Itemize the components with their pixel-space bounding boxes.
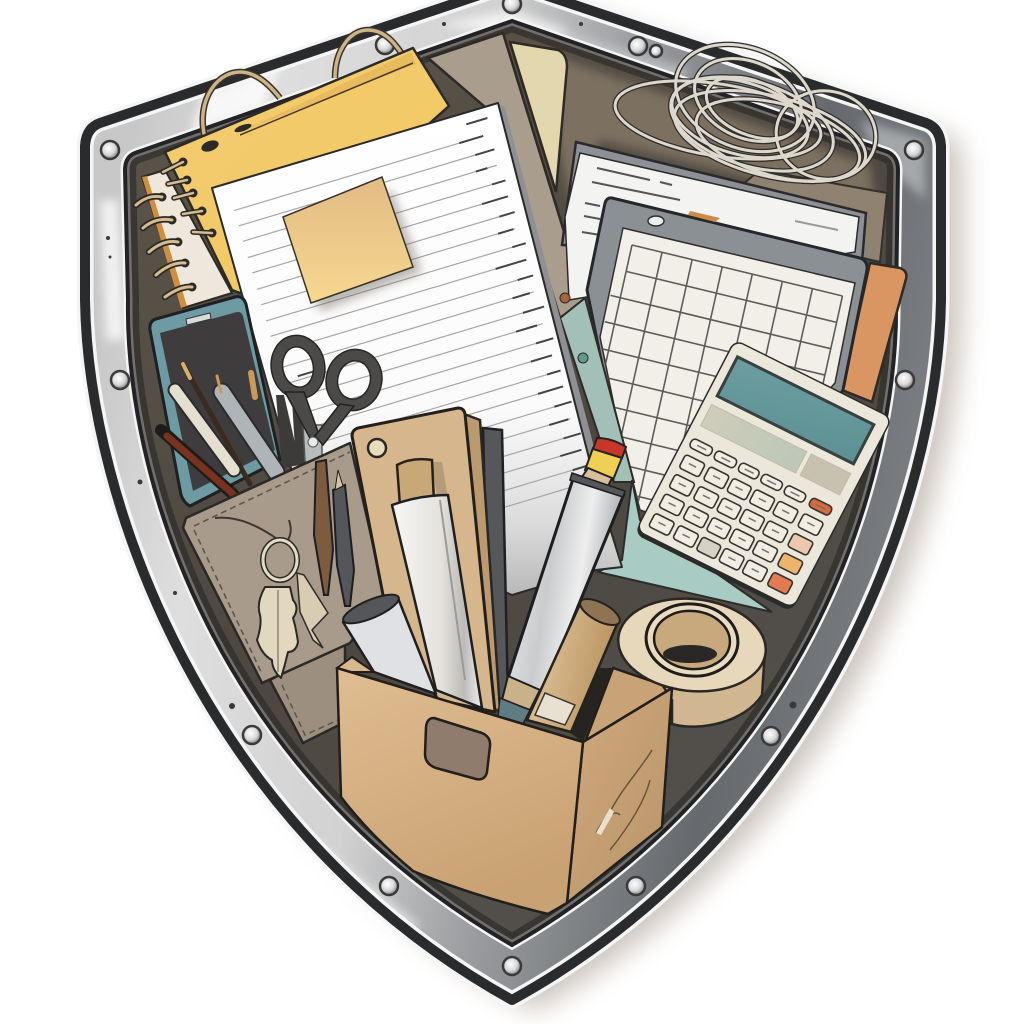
- calendar grid lines: [602, 244, 844, 504]
- pens in pouch: [314, 460, 354, 606]
- gray-brown folder: [428, 33, 585, 318]
- secondary displays: [701, 404, 851, 495]
- main teal screen: [717, 357, 874, 464]
- yellow binder: [165, 48, 449, 293]
- wire light strands: [610, 25, 883, 199]
- tape roll: [614, 592, 770, 727]
- cord: [215, 518, 291, 541]
- pen tip: [502, 676, 540, 710]
- pen barrel: [508, 476, 624, 692]
- rivets: [101, 0, 923, 975]
- key glyph marks: [657, 445, 825, 586]
- band highlights: [100, 10, 925, 940]
- calculator keys: [647, 438, 833, 595]
- keyring and keys: [215, 518, 328, 678]
- back flap of pouch: [270, 640, 345, 743]
- box right side: [567, 688, 672, 903]
- front key: [257, 587, 298, 678]
- short white roll: [340, 589, 436, 694]
- scissors: [273, 338, 382, 468]
- kraft tube: [527, 594, 624, 732]
- dark board: [483, 428, 508, 710]
- binder rings: [203, 30, 402, 148]
- panel inner shade: [125, 21, 898, 945]
- scissor handles: [273, 338, 382, 410]
- teal strip with screws: [560, 293, 634, 482]
- pen eraser cap: [585, 448, 623, 480]
- wire dark outlines: [610, 25, 883, 199]
- tan folder behind right papers: [700, 170, 887, 262]
- calendar grid sheet: [599, 227, 856, 512]
- box front: [337, 668, 583, 914]
- inner panel: [125, 21, 898, 945]
- tape top: [614, 592, 770, 698]
- rear key: [297, 573, 328, 648]
- second tan board: [464, 414, 500, 710]
- phone: [150, 297, 280, 506]
- pen collar: [580, 468, 612, 490]
- box handle hole: [425, 718, 490, 779]
- clipboard: [587, 198, 867, 520]
- left spiral rings: [136, 192, 196, 297]
- scissor blades: [276, 395, 306, 468]
- calculator: [634, 340, 892, 612]
- cork stopper: [397, 459, 434, 506]
- white lined paper: [212, 103, 622, 595]
- gold and silver pen: [175, 390, 234, 470]
- teal sheet under calculator: [598, 480, 772, 612]
- orange folder: [842, 263, 906, 402]
- pens in phone pocket: [161, 364, 276, 494]
- right paper sheet: [562, 142, 866, 300]
- cardboard box: [337, 657, 672, 914]
- big silver pen: [498, 438, 626, 726]
- tan board with hole: [352, 408, 495, 712]
- box left back tab: [337, 657, 374, 672]
- ruled lines: [234, 117, 586, 508]
- band screw holes: [106, 22, 796, 709]
- box scuff marks: [596, 750, 652, 850]
- leather pouch: [183, 443, 385, 683]
- pen gray: [333, 485, 354, 606]
- tape hole: [642, 599, 742, 681]
- ring: [263, 540, 297, 580]
- dark red pen: [161, 430, 233, 494]
- spiral notebook: [136, 170, 232, 308]
- pen dark: [314, 460, 333, 595]
- sticky note: [283, 177, 422, 312]
- tape side: [640, 650, 765, 727]
- gray pen: [222, 392, 276, 472]
- white roll: [392, 495, 482, 708]
- tangled wire coil: [610, 25, 883, 199]
- small gold nib: [251, 373, 255, 397]
- beige folder: [510, 42, 567, 192]
- right spiral rings: [163, 158, 216, 238]
- calculator body: [634, 340, 892, 612]
- box interior back wall: [566, 668, 672, 742]
- thin brown pen: [183, 364, 250, 484]
- silver nib: [217, 376, 221, 392]
